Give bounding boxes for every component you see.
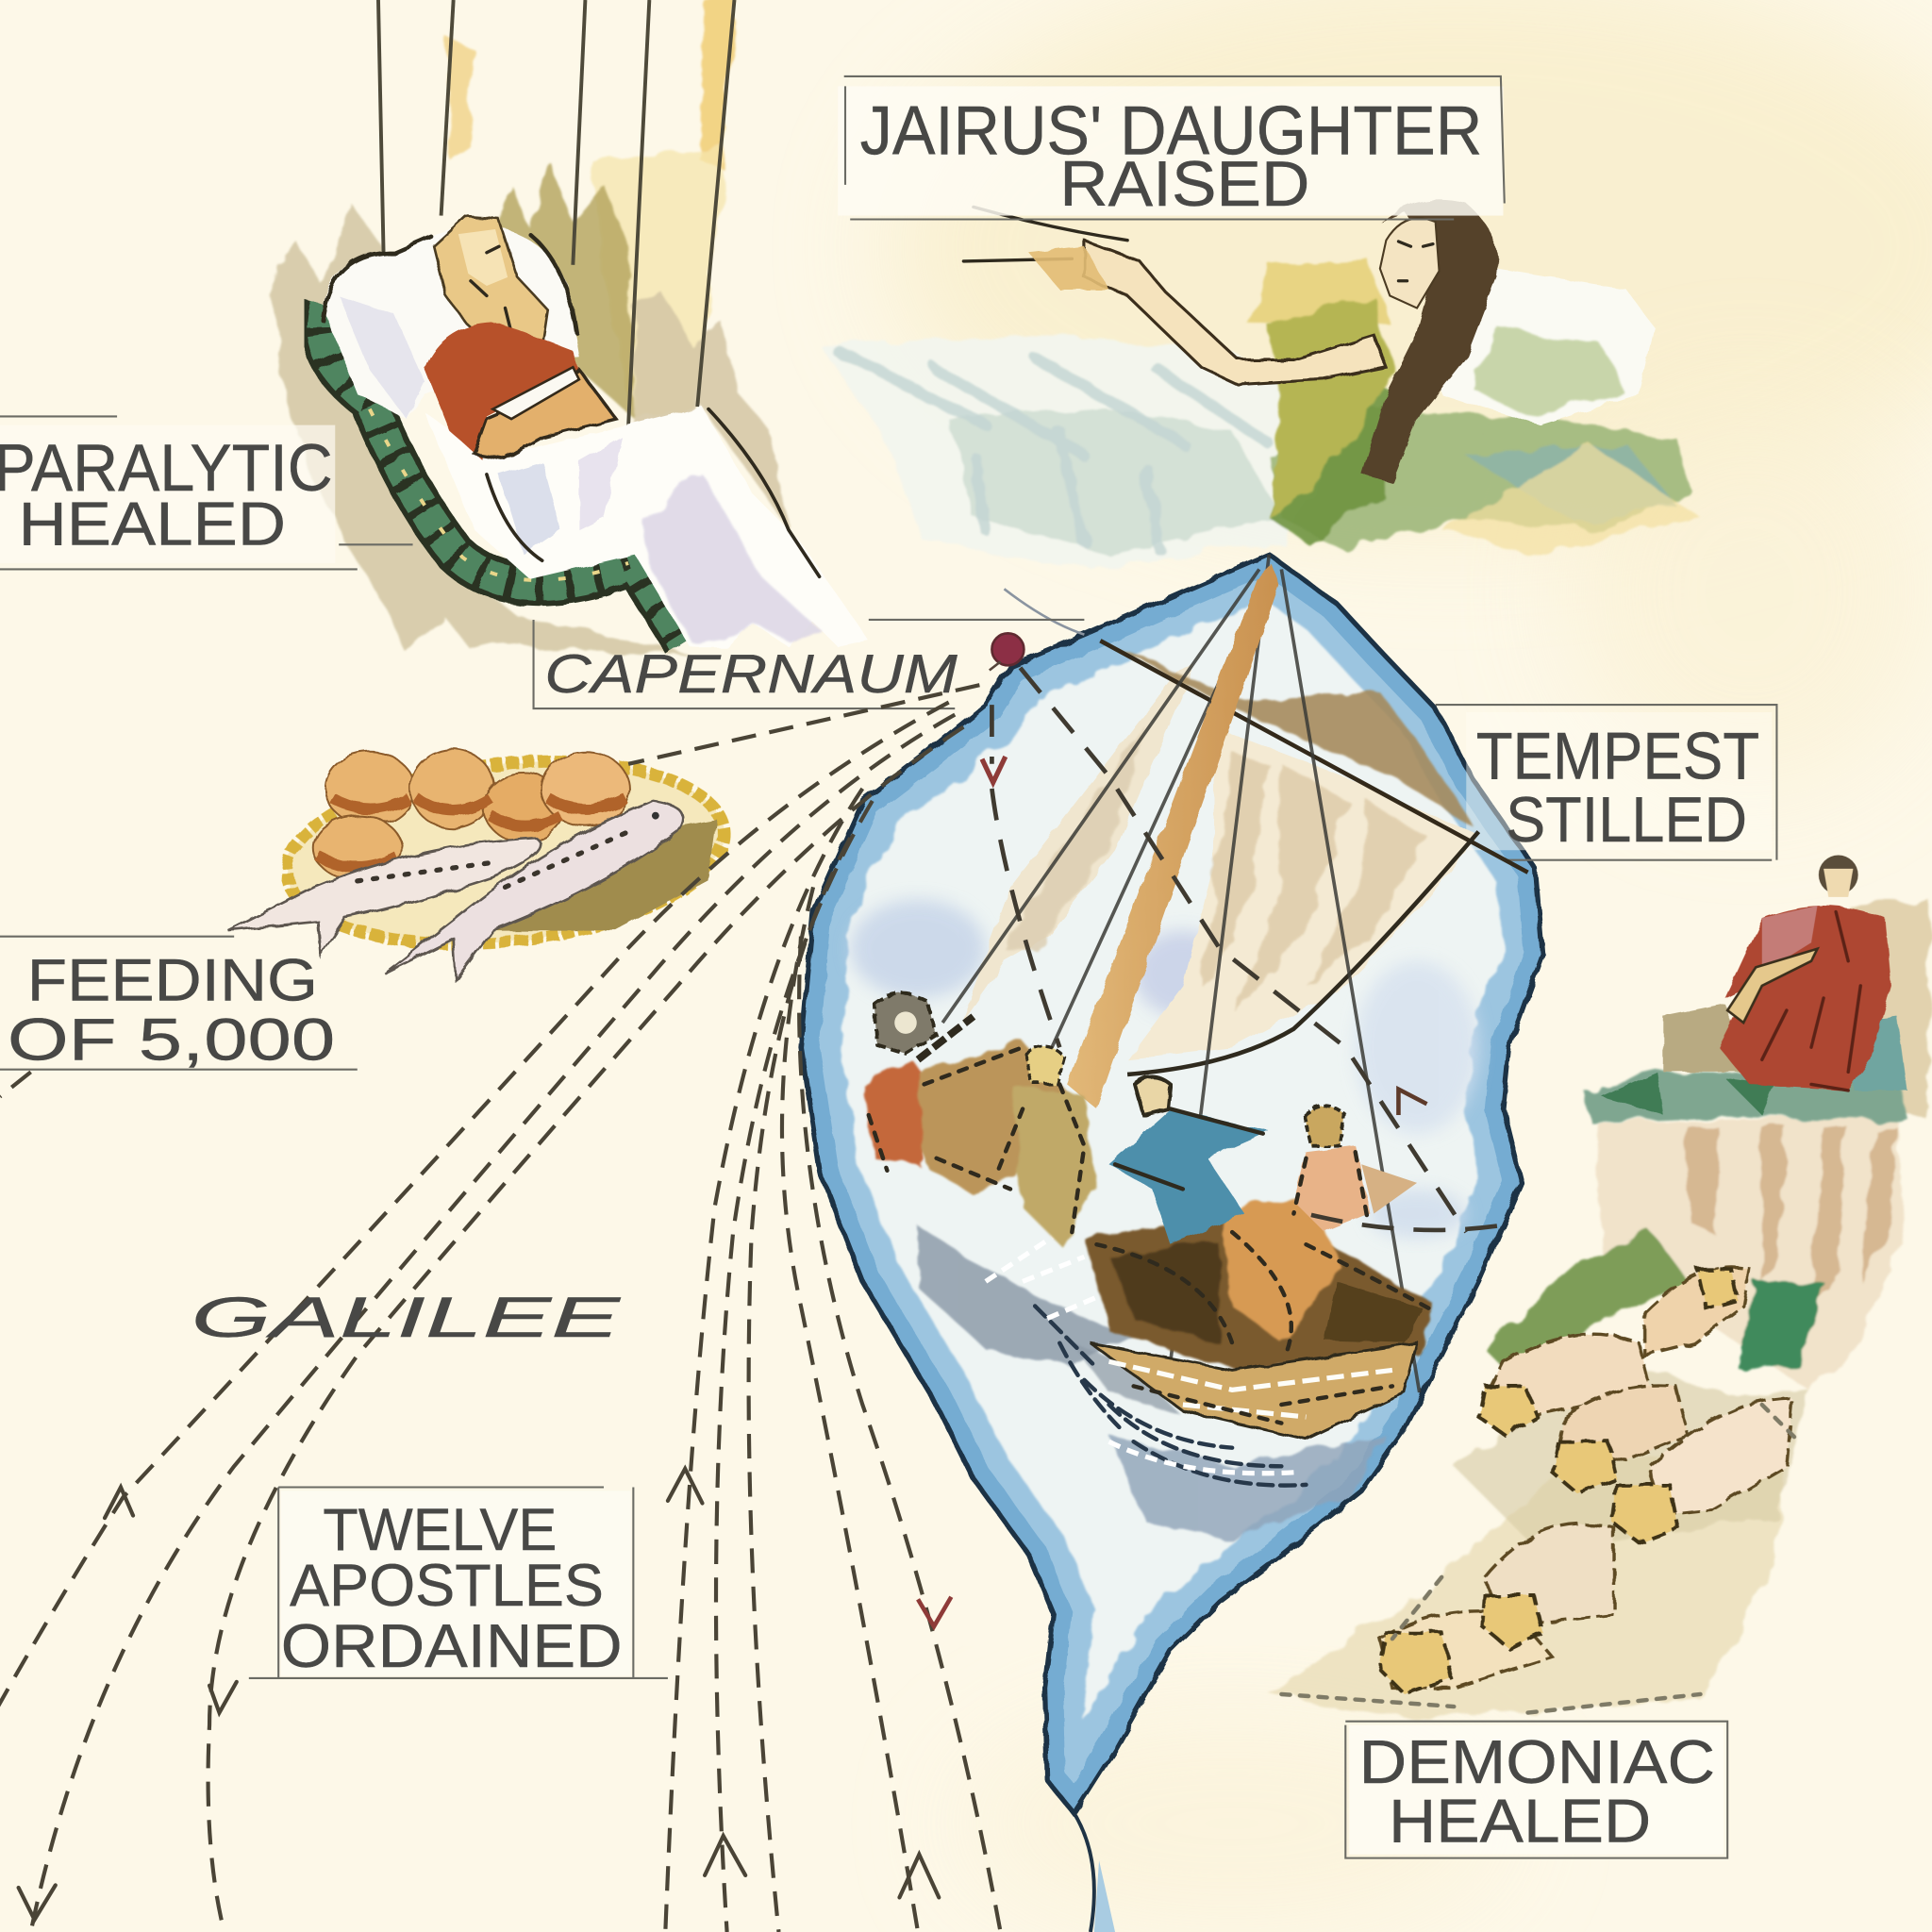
loaves: [313, 749, 629, 880]
label: Capernaum: [534, 620, 1084, 708]
bedding washes: [820, 258, 1700, 569]
swine: [1380, 1267, 1792, 1688]
label: Twelve Apostles ordained: [249, 1487, 668, 1680]
big sail: [1127, 727, 1478, 1059]
basket: [277, 741, 733, 964]
label: Galilee: GALILEE: [191, 1286, 622, 1349]
hull: [1091, 1343, 1417, 1440]
label: Jairus' daughter raised: JAIRUS' DAUGHTER: [860, 92, 1482, 169]
route arrows: [19, 1469, 939, 1920]
grassy ledge: [1583, 1072, 1909, 1122]
label: Tempest stilled: STILLED: [1506, 785, 1747, 856]
wash behind the bed: [271, 160, 789, 653]
label: Twelve Apostles ordained: TWELVE: [323, 1497, 557, 1563]
Sea of Galilee: [801, 555, 1542, 1814]
label: Paralytic healed: [0, 416, 413, 569]
blue-robed figure: [1109, 1077, 1269, 1244]
scene: Jairus' daughter raised: [820, 200, 1700, 569]
white sheet: [425, 407, 869, 647]
label: Jairus' daughter raised: [838, 76, 1505, 220]
label: Paralytic healed: HEALED: [19, 489, 286, 558]
rock seat: [1663, 1004, 1750, 1072]
middle figure: [998, 1046, 1096, 1244]
label: Demoniac healed: [1345, 1722, 1727, 1858]
yellow washes behind roof ropes: [446, 0, 737, 419]
scene: paralytic healed: [271, 0, 869, 653]
label: Capernaum: CAPERNAUM: [544, 644, 958, 705]
label: Feeding of 5,000: OF 5,000: [8, 1007, 335, 1073]
pillow: [1429, 265, 1654, 425]
label: Jairus' daughter raised: RAISED: [1059, 149, 1309, 220]
hull interior: [1084, 1214, 1436, 1368]
upper furled sail: [1103, 641, 1473, 825]
Jordan river outflow: [1074, 1814, 1115, 1932]
pillow: [323, 222, 579, 419]
grey waves: [918, 1226, 1134, 1368]
healed man: [1719, 906, 1891, 1091]
route: dashed journeys from Capernaum: [0, 685, 1001, 1932]
arm and hands: [1084, 241, 1386, 385]
fish 2: [385, 801, 683, 979]
Capernaum marker: [990, 589, 1084, 671]
food: loaves and fishes: [228, 741, 733, 979]
scene: demoniac healed, swine and cliff: [1269, 855, 1928, 1719]
bed frame: [323, 306, 684, 643]
hair: [1361, 200, 1498, 483]
red shirt: [425, 323, 579, 458]
boat in the storm: [862, 555, 1528, 1440]
label: Twelve Apostles ordained: APOSTLES: [290, 1553, 604, 1619]
face: [1380, 218, 1440, 308]
label: Demoniac healed: HEALED: [1389, 1787, 1651, 1856]
ropes lowering the bed: [378, 0, 734, 530]
spars and rigging: [1100, 641, 1528, 873]
dress: [1269, 295, 1392, 518]
mast: [1067, 564, 1279, 1109]
fish 1: [228, 838, 541, 955]
head and beard: [434, 217, 548, 351]
arm: [475, 370, 616, 458]
label: Tempest stilled: TEMPEST: [1476, 718, 1759, 792]
label: Paralytic healed: PARALYTIC: [0, 430, 333, 505]
label: Tempest stilled: [1436, 705, 1776, 860]
label: Feeding of 5,000: [0, 937, 358, 1073]
label: Twelve Apostles ordained: ORDAINED: [281, 1611, 623, 1680]
left sail: [961, 665, 1195, 1023]
lake shore outline: [801, 555, 1542, 1814]
route: lake crossings: [982, 668, 1497, 1232]
label: Demoniac healed: DEMONIAC: [1359, 1727, 1715, 1796]
label: Feeding of 5,000: FEEDING: [27, 948, 318, 1014]
right figure: [1293, 1106, 1417, 1232]
cliff face: [1269, 899, 1928, 1719]
left figure: [862, 994, 1072, 1195]
